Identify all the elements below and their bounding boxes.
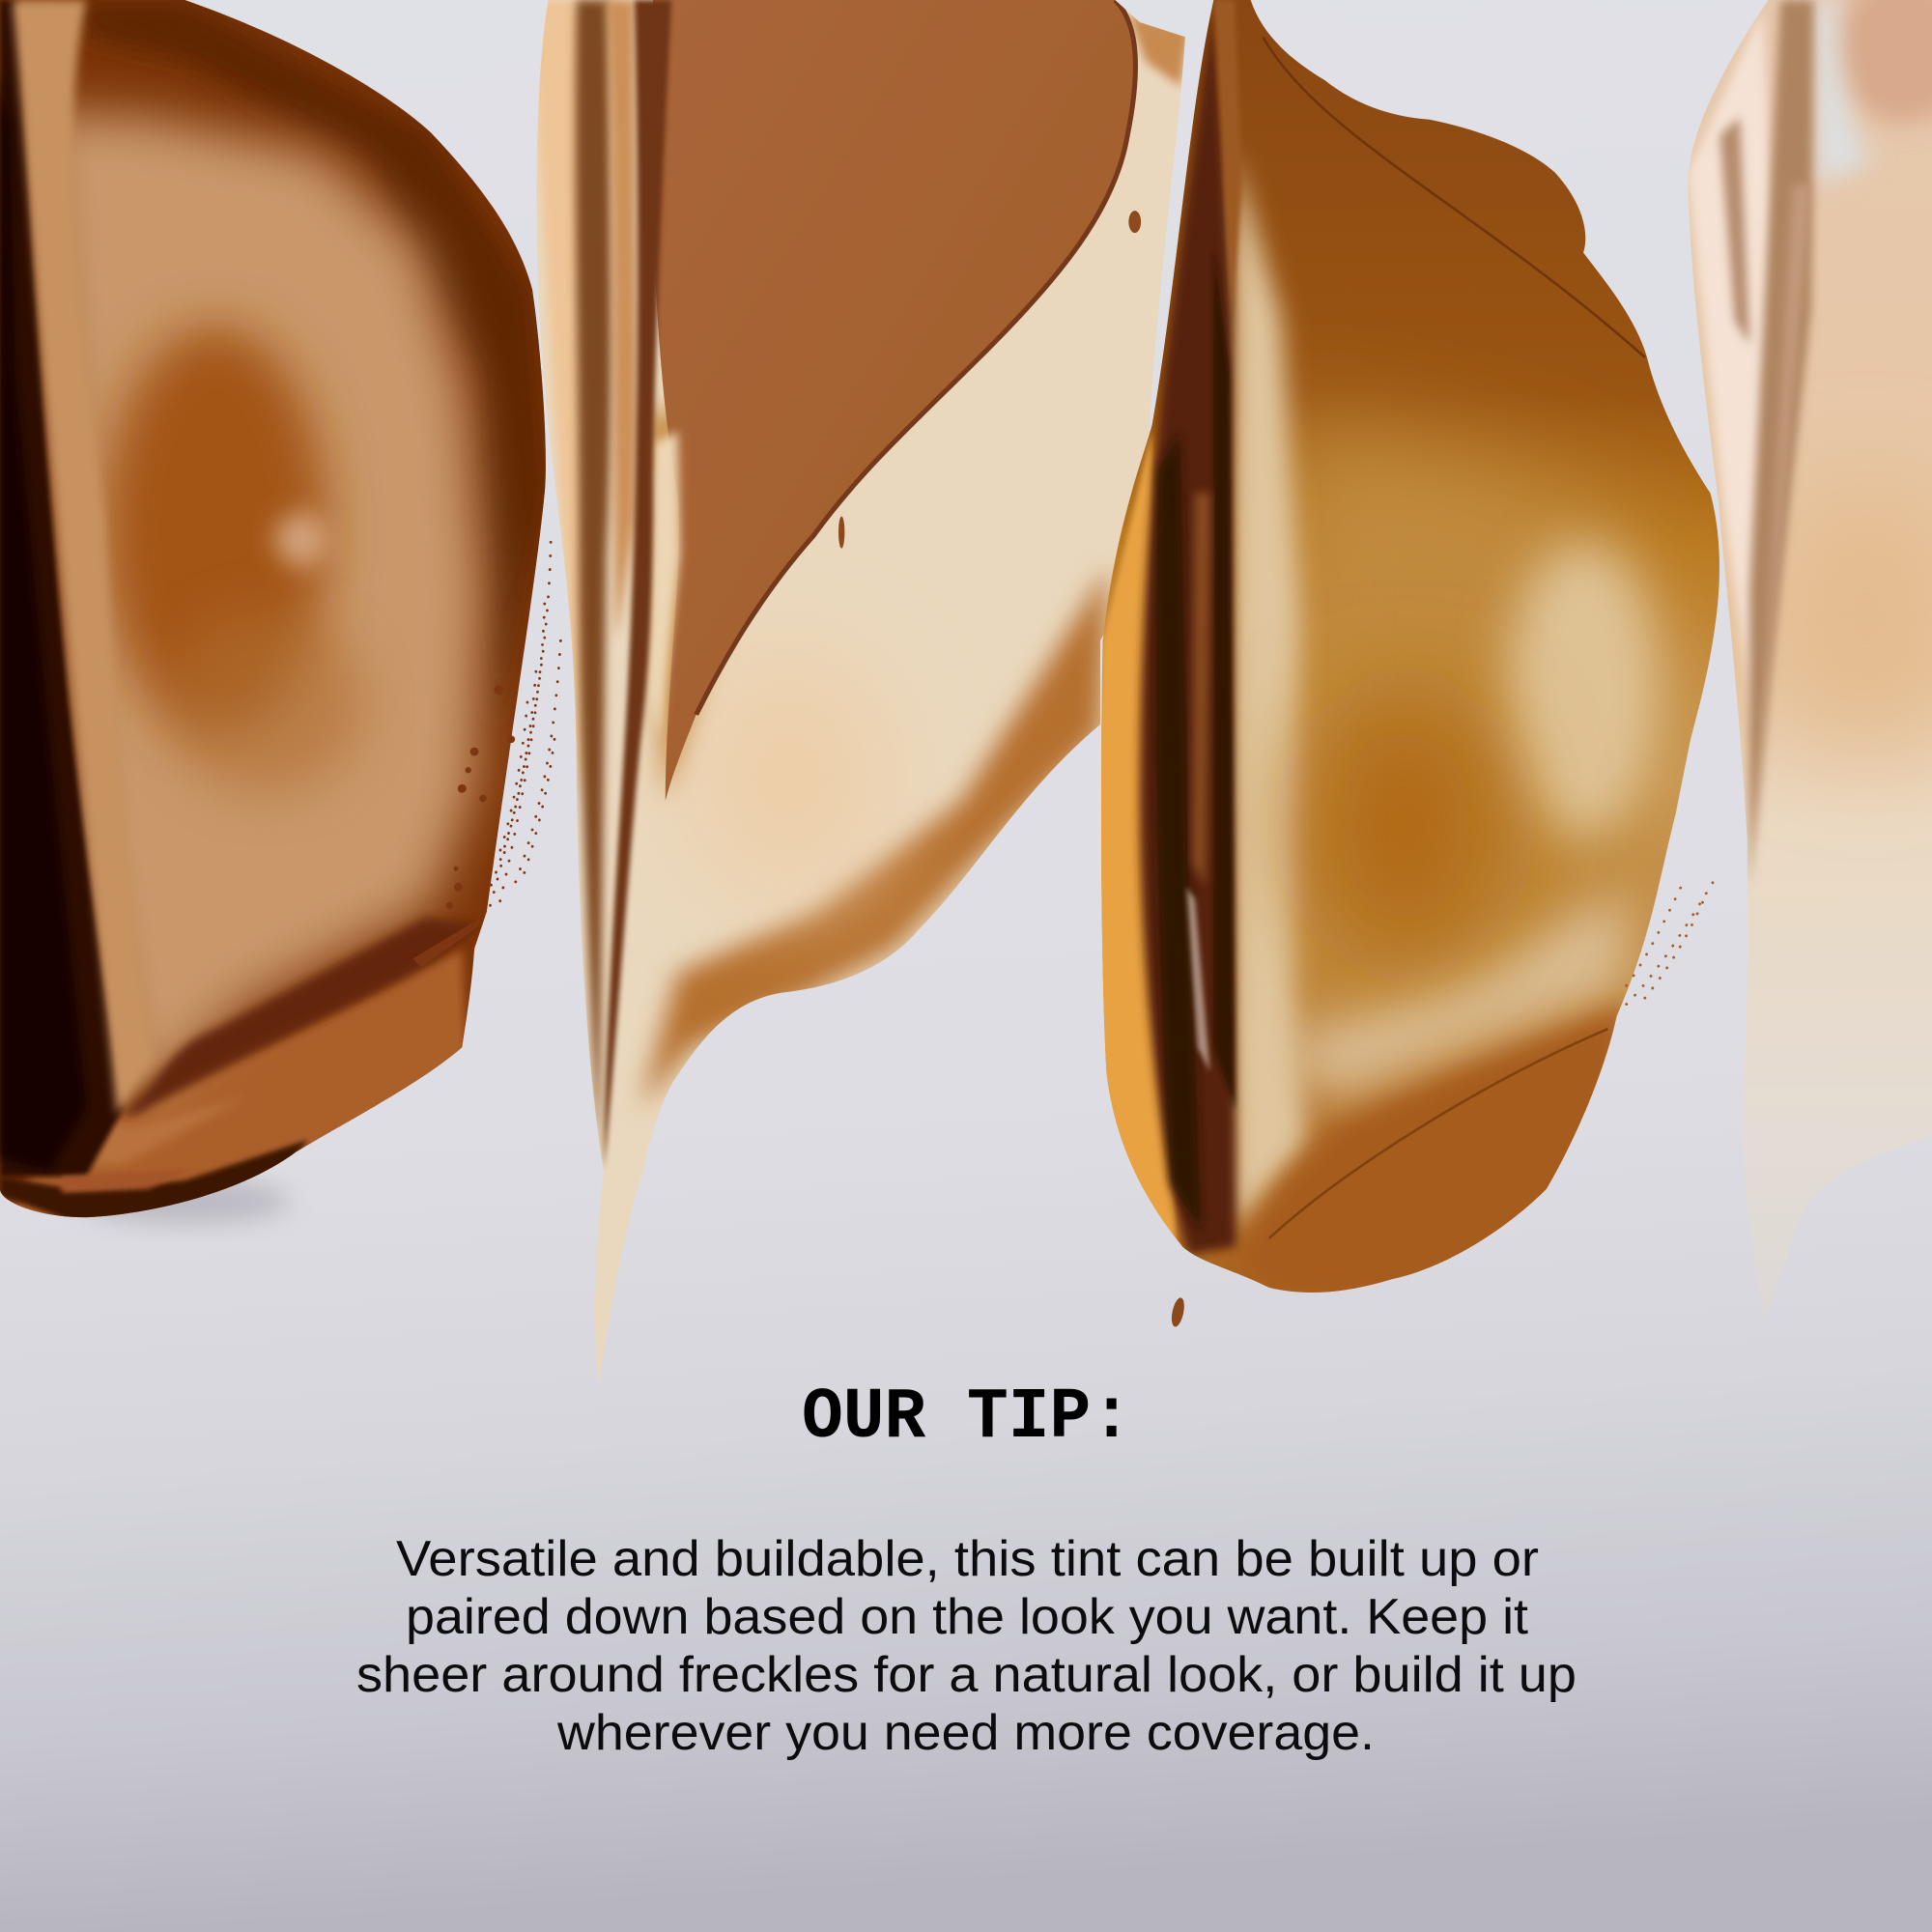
soft ridge bbox=[1720, 117, 1749, 345]
bottom left highlight bbox=[95, 1105, 224, 1165]
brown edge bbox=[696, 0, 1135, 715]
stripe 2 bbox=[604, 0, 671, 1171]
light blob bbox=[274, 513, 329, 567]
heading: OUR TIP: bbox=[802, 1378, 1132, 1459]
band shadow bbox=[124, 918, 480, 1115]
main ridge bbox=[1749, 0, 1814, 887]
golden mid tone bbox=[1282, 419, 1688, 1060]
top tint bbox=[1836, 0, 1932, 124]
cream highlights bbox=[1233, 148, 1306, 1233]
spatter dots bbox=[487, 542, 560, 918]
dark top rim bbox=[74, 0, 549, 739]
light stripe bbox=[607, 0, 638, 640]
body text: wherever you need more coverage. bbox=[556, 1705, 1375, 1761]
mid-tone fade bbox=[640, 567, 1109, 1109]
orange halo bbox=[647, 407, 727, 801]
swatch 2: split tone bbox=[518, 0, 1208, 1392]
swatch 1: deep brown bbox=[0, 0, 567, 1233]
spatter on swatch 3 bbox=[1170, 872, 1719, 1328]
body text: Versatile and buildable, this tint can be built up or bbox=[396, 1531, 1539, 1587]
orange edge bbox=[1084, 431, 1177, 1244]
bottom rim bbox=[0, 1140, 308, 1222]
peach tint bbox=[690, 653, 887, 899]
dark stripe bbox=[1140, 0, 1236, 1254]
left light stripe bbox=[13, 0, 154, 1115]
left dark stripe bbox=[0, 0, 124, 1177]
soft shadow under first swatch bbox=[80, 1179, 290, 1224]
lower band bbox=[1238, 1005, 1627, 1306]
top-right edge bbox=[1127, 13, 1189, 86]
mid tone halo bbox=[166, 610, 363, 795]
left highlight bbox=[1688, 13, 1780, 739]
stripe 1 bbox=[576, 0, 611, 1158]
deepest stripe bbox=[0, 74, 86, 1171]
top sheen bbox=[1213, 0, 1242, 321]
lower band bbox=[0, 949, 474, 1233]
crease lines bbox=[1269, 1029, 1608, 1238]
photo of tint swatches bbox=[0, 0, 1932, 1392]
body text: paired down based on the look you want. Keep it bbox=[406, 1589, 1529, 1645]
swatch 3: golden tan bbox=[1084, 0, 1737, 1306]
body text: sheer around freckles for a natural look, or build it up bbox=[356, 1647, 1577, 1703]
freckles bbox=[412, 542, 560, 967]
glossy highlight bbox=[1186, 887, 1210, 1072]
centre peach glow bbox=[1768, 480, 1932, 752]
golden blob bbox=[1306, 690, 1503, 961]
darker core bbox=[104, 327, 327, 733]
brown coverage bbox=[651, 0, 1135, 801]
light centre bbox=[37, 111, 483, 1115]
left cream ridge bbox=[529, 0, 591, 801]
cream sliver bbox=[647, 431, 680, 739]
body text bbox=[356, 1531, 1577, 1761]
swatch 4: pale peach bbox=[1676, 0, 1932, 1331]
pale gap bbox=[1811, 0, 1873, 185]
drops on swatch 2 bbox=[838, 211, 1141, 549]
